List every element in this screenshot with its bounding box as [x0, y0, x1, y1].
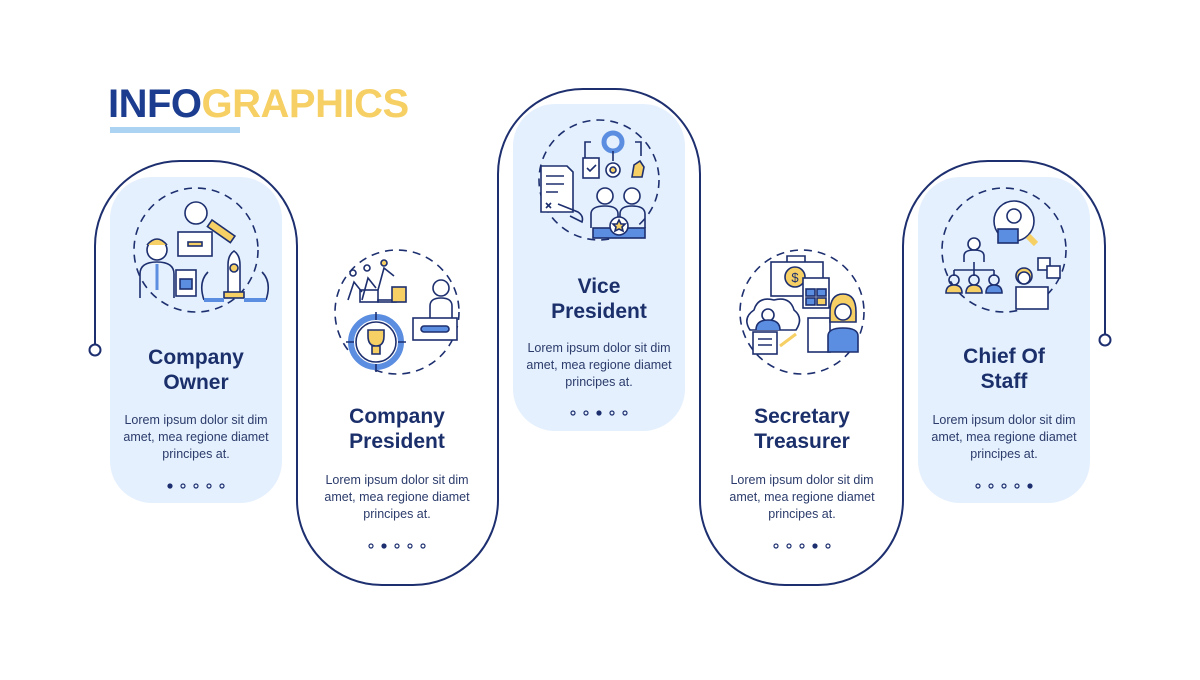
icon: owner [134, 188, 268, 312]
heading: secretary treasurer: Secretary [754, 405, 850, 428]
text: vice president body: principes at. [565, 375, 633, 389]
panel: vice president [526, 120, 672, 415]
dots [774, 544, 830, 548]
panel: company president [324, 250, 470, 548]
panel: company owner: Owner [163, 371, 229, 394]
text: president body: principes at. [363, 507, 431, 521]
text: treasurer body [729, 473, 875, 521]
dots [369, 544, 425, 548]
heading: company owner: Company [148, 346, 244, 369]
text: owner body: principes at. [162, 447, 230, 461]
panel: chief of staff: Staff [981, 370, 1028, 393]
text: treasurer body: amet, mea regione diamet [729, 490, 875, 504]
panel: chief of staff [931, 188, 1077, 488]
text: vice president body: amet, mea regione diamet [526, 358, 672, 372]
title: INFOGRAPHICS [108, 82, 409, 126]
icon: chief of staff [942, 188, 1066, 312]
dots [571, 411, 627, 415]
panel: secretary treasurer [729, 250, 875, 548]
text: chief body: amet, mea regione diamet [931, 430, 1077, 444]
panel: company owner [123, 188, 269, 488]
text: vice president body: Lorem ipsum dolor sit dim [527, 341, 671, 355]
connector outline path [90, 89, 1110, 585]
text: president body [324, 473, 470, 521]
text: vice president body [526, 341, 672, 389]
dots [168, 484, 224, 488]
text: owner body [123, 413, 269, 461]
text: president body: Lorem ipsum dolor sit dim [325, 473, 469, 487]
text: chief body: principes at. [970, 447, 1038, 461]
icon: vice president [539, 120, 659, 240]
text: president body: amet, mea regione diamet [324, 490, 470, 504]
text: owner body: Lorem ipsum dolor sit dim [124, 413, 268, 427]
icon: president [335, 250, 459, 374]
text: treasurer body: principes at. [768, 507, 836, 521]
panel: company president: President [349, 430, 445, 453]
panel: secretary treasurer: Treasurer [754, 430, 850, 453]
text: chief body: Lorem ipsum dolor sit dim [932, 413, 1076, 427]
panel fills [110, 104, 1090, 503]
text: chief body [931, 413, 1077, 461]
text: owner body: amet, mea regione diamet [123, 430, 269, 444]
dots [976, 484, 1032, 488]
heading: vice president: Vice [578, 275, 620, 298]
heading: chief of staff: Chief Of [963, 345, 1046, 368]
panel: vice president: President [551, 300, 647, 323]
icon: treasurer: $ [791, 270, 799, 285]
heading: company president: Company [349, 405, 445, 428]
icon: treasurer [740, 250, 864, 374]
text: treasurer body: Lorem ipsum dolor sit dim [730, 473, 874, 487]
